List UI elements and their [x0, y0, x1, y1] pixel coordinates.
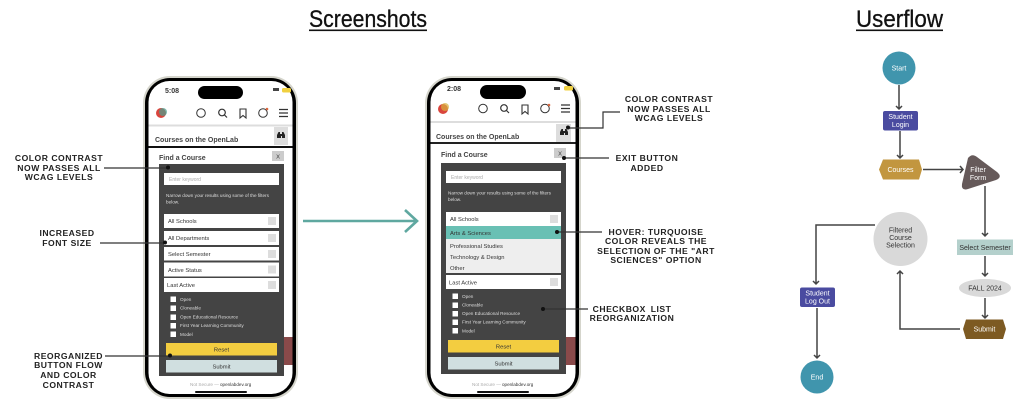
phone: revised screen: below.	[448, 197, 461, 202]
heading: screenshots: Screenshots	[309, 6, 427, 33]
callout: increased font size	[39, 228, 167, 248]
phone: revised screen: Courses on the OpenLab	[436, 134, 519, 141]
callout: checkbox list	[541, 304, 674, 323]
phone: original screen: Enter keyword	[169, 177, 201, 183]
phone: revised screen: All Schools	[450, 217, 479, 223]
phone: revised screen: openlabdev.org	[502, 382, 534, 387]
callout: checkbox list: CHECKBOX LIST	[593, 304, 672, 314]
phone: revised screen: Reset	[496, 344, 511, 350]
flow node: submit: Submit	[974, 326, 995, 334]
phone: original screen: Courses on the OpenLab	[155, 137, 238, 144]
callout: exit button added: EXIT BUTTON	[616, 153, 678, 163]
phone: revised screen: Professional Studies	[450, 244, 503, 250]
flow node: student log out: Log Out	[805, 298, 830, 306]
phone: original screen: Model	[180, 332, 193, 337]
phone: revised screen: Last Active	[449, 280, 477, 286]
phone: revised screen: First Year Learning Community	[462, 320, 526, 324]
flow node: student login	[883, 111, 918, 130]
phone: original screen: Narrow down your results using some of the filters	[166, 193, 270, 198]
flow node: filtered course selection: Filtered	[889, 228, 912, 234]
flow node: start: Start	[892, 66, 906, 72]
phone: revised screen	[425, 76, 581, 399]
phone: original screen: Open Educational Resource	[180, 314, 238, 320]
phone: original screen: Reset	[214, 348, 229, 354]
callout: color contrast right: COLOR CONTRAST	[625, 94, 713, 104]
flow node: filter form: Form	[970, 175, 986, 182]
phone: original screen: X	[276, 154, 280, 160]
flow node: courses: Courses	[887, 167, 914, 174]
flow node: end	[800, 360, 834, 394]
phone: original screen: Active Status	[168, 268, 202, 274]
callout: color contrast right: NOW PASSES ALL	[627, 104, 711, 114]
phone: original screen: Submit	[212, 364, 231, 370]
flow node: student login: Student	[888, 114, 913, 121]
callout: reorganized button flow	[34, 351, 172, 390]
callout: reorganized button flow: REORGANIZED	[34, 351, 103, 361]
phone: revised screen: Find a Course	[441, 152, 488, 159]
phone: revised screen: Open	[462, 294, 474, 299]
flow node: select semester: Select Semester	[959, 245, 1011, 252]
phone: original screen: below.	[166, 200, 179, 204]
phone: original screen: openlabdev.org	[220, 382, 252, 387]
flow node: start	[882, 52, 916, 84]
phone: original screen: Open	[180, 297, 192, 302]
flow node: filtered course selection: Course	[889, 235, 912, 242]
callout: checkbox list: REORGANIZATION	[590, 313, 674, 323]
callout: increased font size: INCREASED	[39, 228, 95, 238]
arrow: before to after	[303, 210, 417, 232]
callout: color contrast left	[15, 153, 170, 182]
callout: hover: SELECTION OF THE "ART	[597, 246, 715, 256]
phone: original screen	[143, 76, 298, 399]
phone: original screen: Cloneable	[180, 306, 201, 310]
callout: reorganized button flow: BUTTON FLOW	[34, 360, 103, 370]
flow node: end: End	[811, 374, 823, 382]
flow node: fall 2024	[959, 279, 1011, 297]
phone: original screen: Not Secure —	[190, 382, 219, 387]
flow node: courses	[879, 160, 922, 180]
phone: original screen: All Departments	[168, 236, 209, 242]
callout: hover: SCIENCES" OPTION	[610, 255, 702, 265]
phone: original screen: First Year Learning Community	[180, 323, 244, 328]
callout: exit button added	[562, 153, 678, 173]
phone: original screen: Last Active	[167, 283, 195, 289]
phone: revised screen: 2:08	[447, 86, 461, 93]
callout: reorganized button flow: CONTRAST	[43, 380, 95, 390]
phone: revised screen: Model	[462, 328, 475, 334]
callout: increased font size: FONT SIZE	[42, 238, 92, 248]
flow node: filter form	[962, 155, 1000, 189]
phone: revised screen: Technology & Design	[450, 255, 504, 261]
callout: hover: HOVER: TURQUOISE	[609, 227, 703, 237]
flow node: filter form: Filter	[970, 167, 986, 174]
callout: color contrast left: NOW PASSES ALL	[17, 163, 101, 173]
flow arrows	[813, 85, 988, 358]
flow node: student log out	[800, 288, 835, 307]
phone: original screen: 5:08	[165, 88, 179, 95]
callout: color contrast left: WCAG LEVELS	[25, 172, 93, 182]
phone: revised screen: Arts & Sciences	[450, 231, 491, 237]
flow node: filtered course selection	[874, 212, 928, 266]
phone: revised screen: Cloneable	[462, 302, 483, 308]
callout: reorganized button flow: AND COLOR	[40, 370, 97, 380]
callout: hover	[555, 227, 715, 265]
flow node: student log out: Student	[805, 290, 830, 298]
phone: original screen: Find a Course	[159, 155, 206, 162]
phone: revised screen: Narrow down your results using some of the filters	[448, 190, 552, 196]
phone: original screen: All Schools	[168, 219, 197, 225]
phone: revised screen: Enter keyword	[451, 175, 483, 181]
callout: color contrast left: COLOR CONTRAST	[15, 153, 103, 163]
phone: original screen: Select Semester	[168, 252, 211, 258]
callout: exit button added: ADDED	[630, 163, 664, 173]
phone: revised screen: Other	[450, 266, 465, 272]
phone: revised screen: Not Secure —	[472, 382, 501, 387]
callout: color contrast right: WCAG LEVELS	[635, 113, 703, 123]
flow node: submit	[963, 320, 1006, 339]
heading: userflow: Userflow	[856, 6, 944, 33]
phone: revised screen: Submit	[494, 362, 513, 368]
callout: color contrast right	[566, 94, 713, 130]
phone: revised screen: Open Educational Resource	[462, 311, 520, 316]
flow node: filtered course selection: Selection	[886, 242, 915, 250]
flow node: select semester	[957, 240, 1013, 255]
flow node: student login: Login	[892, 122, 909, 129]
callout: hover: COLOR REVEALS THE	[605, 236, 707, 246]
phone: revised screen: X	[558, 152, 562, 158]
flow node: fall 2024: FALL 2024	[968, 286, 1002, 292]
